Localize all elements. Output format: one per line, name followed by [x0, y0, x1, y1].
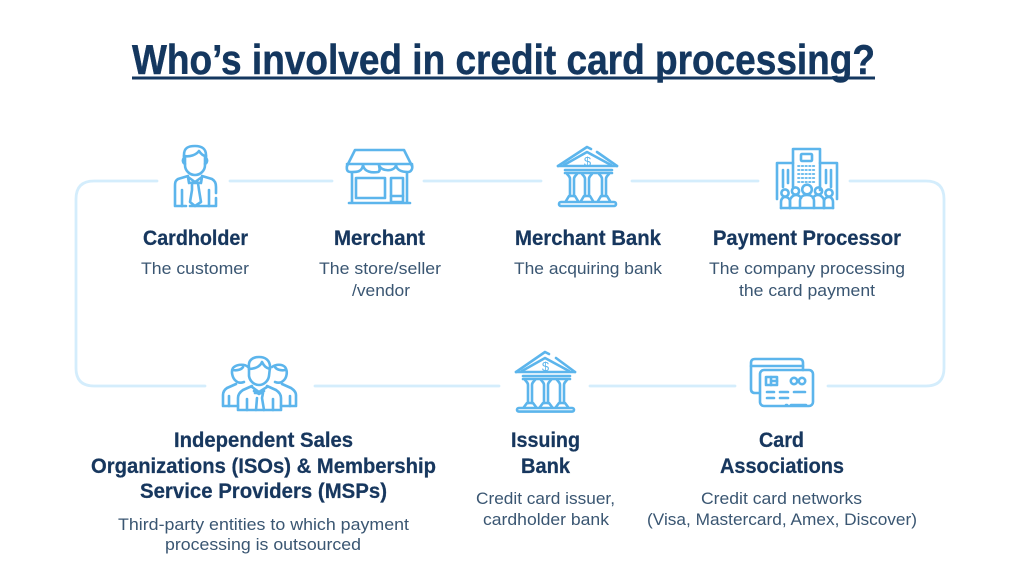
connector loop: [76, 181, 944, 386]
column: issuing bank: Issuing: [511, 429, 580, 452]
column: merchant bank: The acquiring bank: [514, 259, 663, 278]
column: merchant: The store/seller: [319, 259, 441, 278]
column: merchant: [319, 227, 441, 300]
column: issuing bank: cardholder bank: [483, 510, 610, 529]
icon: issuing bank: $: [542, 359, 550, 374]
column: payment processor: the card payment: [739, 281, 875, 300]
column: payment processor: The company processing: [709, 259, 905, 278]
column: issuing bank: Bank: [521, 455, 570, 478]
icon: payment processor: [777, 149, 837, 208]
column: ISOs and MSPs: Service Providers (MSPs): [140, 480, 387, 503]
column: issuing bank: Credit card issuer,: [476, 489, 615, 508]
column: merchant bank: Merchant Bank: [515, 227, 661, 250]
column: card associations: (Visa, Mastercard, Amex, Discover): [647, 510, 917, 529]
column: cardholder: [141, 227, 249, 278]
column: payment processor: Payment Processor: [713, 227, 901, 250]
column: merchant: Merchant: [334, 227, 425, 250]
column: merchant: /vendor: [352, 281, 410, 300]
column: card associations: Credit card networks: [701, 489, 862, 508]
column: card associations: [647, 429, 917, 529]
column: ISOs and MSPs: processing is outsourced: [165, 535, 361, 554]
icon: merchant bank: [558, 147, 617, 206]
icon: credit cards: [751, 359, 813, 406]
column: ISOs and MSPs: Third-party entities to which payment: [118, 515, 409, 534]
column: payment processor: [709, 227, 905, 300]
column: merchant bank: [514, 227, 663, 278]
column: ISOs and MSPs: Organizations (ISOs) & Membership: [91, 455, 436, 478]
column: cardholder: Cardholder: [143, 227, 248, 250]
column: issuing bank: [476, 429, 615, 529]
column: cardholder: The customer: [141, 259, 249, 278]
column: ISOs and MSPs: [91, 429, 436, 554]
icon: ISOs and MSPs team: [223, 357, 296, 410]
title: Who’s involved in credit card processing?: [132, 36, 875, 83]
icon: issuing bank: [516, 352, 575, 412]
column: card associations: Card: [759, 429, 804, 452]
icon: merchant store: [347, 150, 412, 203]
icon: cardholder: [175, 146, 216, 206]
column: ISOs and MSPs: Independent Sales: [174, 429, 353, 452]
icon: merchant bank: $: [584, 154, 592, 169]
column: card associations: Associations: [720, 455, 844, 478]
